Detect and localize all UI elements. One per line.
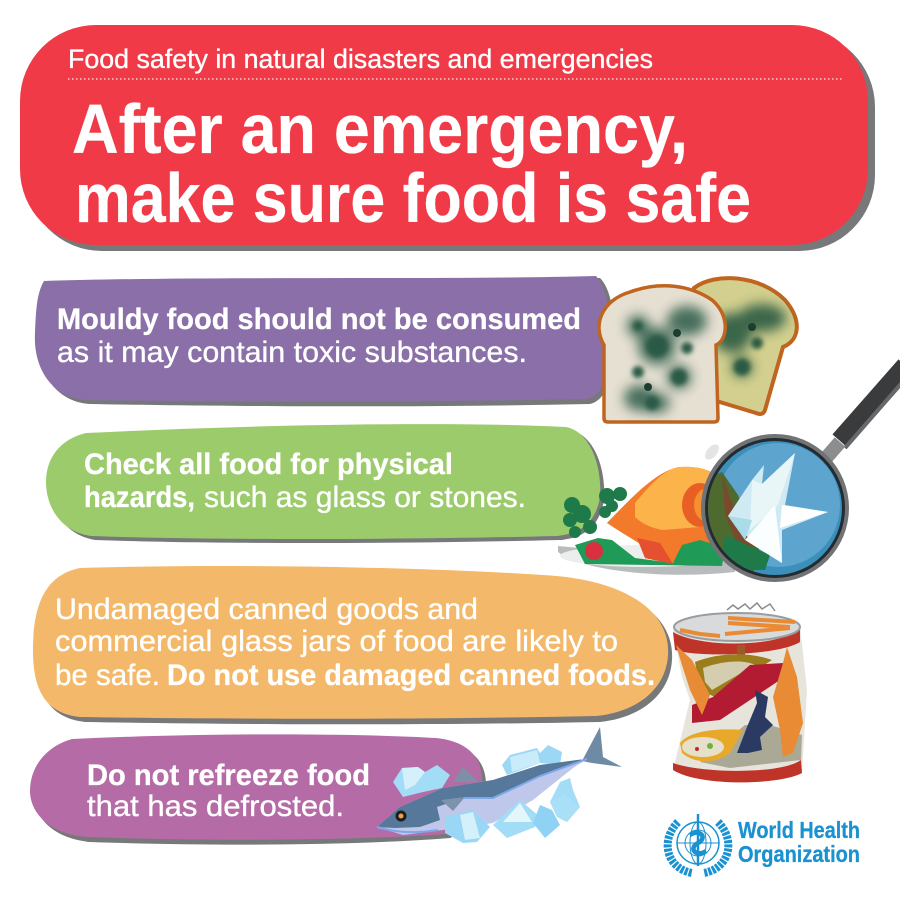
wordmark bbox=[738, 817, 860, 867]
panel: physical hazards bbox=[46, 424, 604, 543]
panel: mouldy food: Mouldy food should not be consumed bbox=[57, 303, 581, 336]
title: After an emergency, bbox=[72, 90, 688, 168]
subtitle: Food safety in natural disasters and emergencies bbox=[68, 44, 653, 74]
ice cubes behind fish bbox=[393, 745, 580, 822]
wordmark: World Health bbox=[738, 817, 860, 843]
panel: physical hazards: such as glass or stones. bbox=[204, 481, 526, 514]
logo: World Health Organization bbox=[668, 814, 860, 873]
icon: magnifying glass bbox=[701, 366, 900, 582]
icon: damaged can bbox=[673, 603, 807, 782]
panel: physical hazards: Check all food for physical bbox=[84, 448, 453, 481]
broccoli bbox=[563, 487, 627, 538]
title: make sure food is safe bbox=[75, 159, 751, 237]
panel: canned goods: commercial glass jars of food are likely to bbox=[55, 625, 618, 658]
icon: turkey on plate bbox=[558, 442, 735, 575]
panel: do not refreeze: Do not refreeze food bbox=[87, 759, 370, 792]
title bbox=[72, 90, 751, 237]
panel: canned goods: be safe. bbox=[55, 659, 160, 692]
icon: fish on ice bbox=[377, 727, 622, 843]
wordmark: Organization bbox=[738, 841, 860, 867]
icon: mouldy bread bbox=[599, 278, 797, 422]
glass shards bbox=[728, 453, 828, 563]
panel: canned goods: Do not use damaged canned foods. bbox=[167, 659, 655, 692]
panel: canned goods bbox=[33, 566, 672, 724]
emblem bbox=[668, 814, 728, 873]
panel: do not refreeze: that has defrosted. bbox=[87, 790, 344, 823]
header banner bbox=[20, 25, 875, 251]
panel: do not refreeze bbox=[30, 734, 486, 845]
panel: physical hazards: hazards, bbox=[84, 481, 195, 514]
panel: mouldy food: as it may contain toxic substances. bbox=[57, 336, 527, 369]
panel: canned goods: Undamaged canned goods and bbox=[55, 593, 478, 626]
panel: mouldy food bbox=[35, 276, 613, 406]
ice cubes in front bbox=[445, 794, 580, 843]
